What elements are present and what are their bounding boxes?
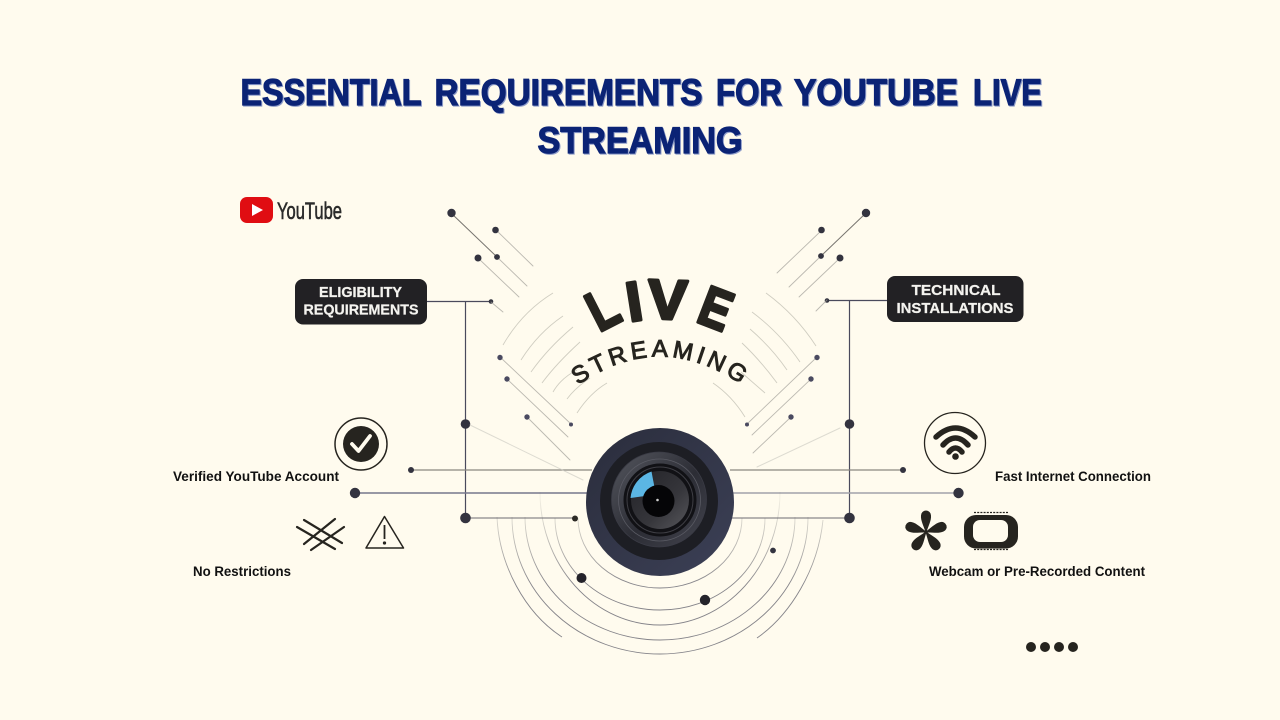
- title: LIVE: [973, 72, 1042, 113]
- title: STREAMING: [538, 120, 742, 161]
- title: REQUIREMENTS: [434, 72, 702, 113]
- icon: camera lens: [586, 428, 734, 576]
- live streaming badge text: [572, 269, 746, 384]
- title: ESSENTIAL: [240, 72, 422, 113]
- label box: eligibility requirements: [295, 279, 427, 324]
- label box: technical installations: INSTALLATIONS: [896, 301, 1014, 317]
- icon: asterisk: [904, 510, 948, 552]
- icon: verified check: [335, 418, 387, 470]
- pagination dots: [1026, 642, 1078, 652]
- connector lines: right tree: [730, 298, 964, 523]
- lower wave arcs: [497, 492, 823, 654]
- label: no restrictions: No Restrictions: [193, 564, 291, 579]
- icon: warning triangle: [366, 516, 404, 548]
- label box: eligibility requirements: REQUIREMENTS: [304, 302, 419, 318]
- label box: technical installations: [887, 276, 1024, 322]
- live streaming badge text: V: [647, 269, 689, 332]
- signal dots upper: [447, 209, 870, 426]
- label box: eligibility requirements: ELIGIBILITY: [319, 285, 402, 301]
- icon: rounded video frame: [964, 512, 1018, 550]
- live streaming badge text: E: [690, 274, 741, 343]
- diagonal signal lines: [451, 213, 866, 480]
- title: YOUTUBE: [794, 72, 958, 113]
- label: verified youtube account: Verified YouTube Account: [173, 469, 339, 484]
- live streaming badge text: STREAMING: [572, 340, 746, 384]
- live streaming badge text: L: [576, 275, 629, 343]
- icon: YouTube logo: YouTube: [277, 198, 342, 225]
- icon: YouTube logo: [240, 197, 342, 225]
- icon: wifi: [924, 412, 986, 474]
- upper wave arcs: [503, 293, 816, 417]
- title: [240, 72, 1042, 161]
- live streaming badge text: I: [621, 269, 647, 334]
- label: webcam or pre-recorded content: Webcam or Pre-Recorded Content: [929, 564, 1145, 579]
- lower wave dots: [576, 548, 776, 605]
- label box: technical installations: TECHNICAL: [912, 283, 1001, 299]
- connector lines: left tree: [350, 299, 592, 523]
- title: FOR: [716, 72, 782, 113]
- label: fast internet connection: Fast Internet Connection: [995, 469, 1151, 484]
- icon: crossed lines: [297, 519, 344, 550]
